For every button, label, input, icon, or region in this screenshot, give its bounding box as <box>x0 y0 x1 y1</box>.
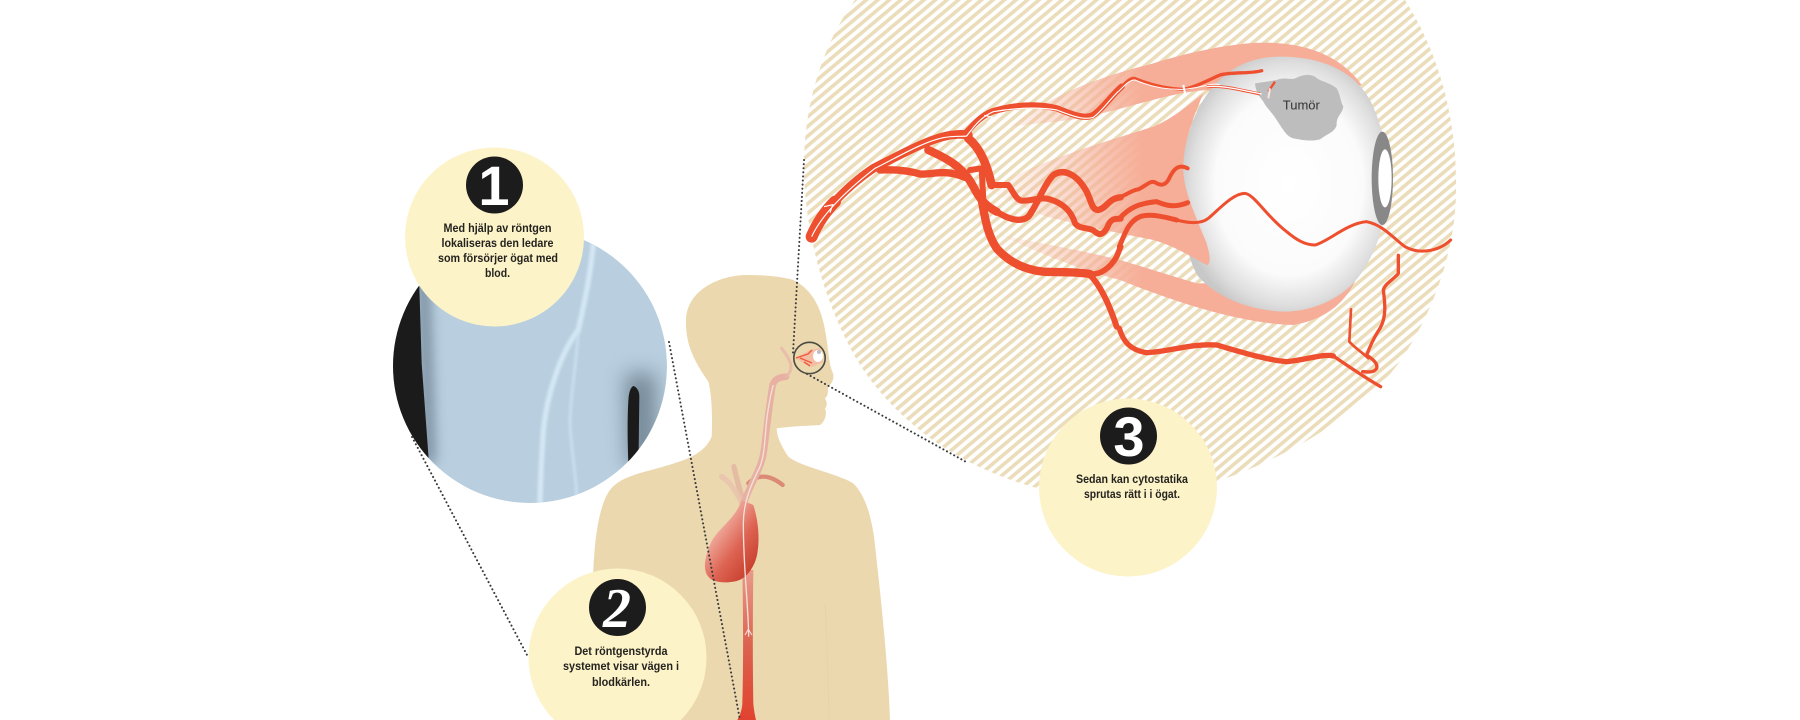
text 3: sprutas rätt i i ögat. <box>1084 487 1180 501</box>
x-ray shadow <box>423 280 429 463</box>
badge 2 <box>589 578 646 640</box>
eye muscles behind eyeball <box>1000 43 1362 325</box>
text 1: Med hjälp av röntgen <box>444 221 552 235</box>
text 3: Sedan kan cytostatika <box>1076 472 1188 486</box>
arteries right part <box>1119 71 1451 387</box>
step 3 callout <box>1039 398 1217 576</box>
text 1 <box>438 221 558 280</box>
arteries left part <box>812 87 1122 327</box>
text 2: blodkärlen. <box>592 675 650 689</box>
text 1: som försörjer ögat med <box>438 251 558 265</box>
pupil and iris <box>1372 132 1393 225</box>
badge 3: 3 <box>1113 405 1145 468</box>
x-ray circle <box>380 229 667 507</box>
step 1 callout <box>405 148 584 326</box>
dotted connector lines <box>412 160 968 720</box>
badge 3 <box>1100 405 1157 468</box>
badge 2: 2 <box>602 578 631 640</box>
catheter reaching tumor <box>1207 86 1260 94</box>
upper artery to tumor <box>1119 78 1183 89</box>
step 2 callout <box>528 568 706 720</box>
catheter line <box>812 88 1122 237</box>
badge 1: 1 <box>478 154 510 217</box>
eye muscle over eyeball <box>987 93 1210 265</box>
text 3 <box>1076 472 1188 501</box>
tumor <box>1255 75 1343 140</box>
badge 1 <box>466 154 523 217</box>
text 2: systemet visar vägen i <box>563 659 679 673</box>
text 1: lokaliseras den ledare <box>442 236 554 250</box>
eye illustration <box>987 43 1393 325</box>
text 2: Det röntgenstyrda <box>574 644 668 658</box>
x-ray vessels <box>540 243 593 507</box>
heart and blood vessels in the body <box>705 348 791 720</box>
eyeball <box>1182 57 1388 312</box>
body silhouette <box>590 275 890 720</box>
small eye in the head with ring <box>794 342 825 374</box>
hatched magnified circle <box>804 0 1456 494</box>
text 2 <box>563 644 679 689</box>
tumor: Tumör <box>1283 97 1321 112</box>
text 1: blod. <box>485 266 510 280</box>
x-ray black instruments <box>393 286 429 458</box>
